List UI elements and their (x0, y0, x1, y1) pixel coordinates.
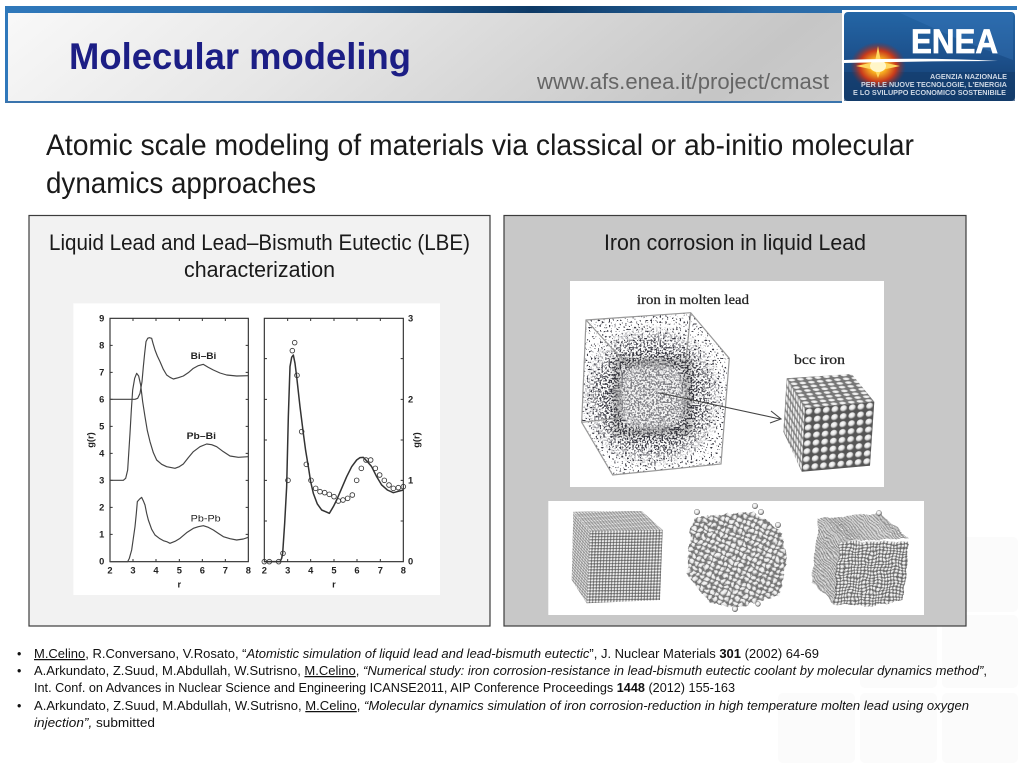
dissolving iron cluster (687, 503, 787, 612)
ENEA logo (842, 10, 1018, 103)
right g(r) plot (262, 313, 421, 590)
right plot labels: 6 (354, 566, 360, 576)
right plot labels (262, 313, 421, 590)
left plot labels (85, 313, 251, 590)
left plot labels: 3 (99, 475, 104, 485)
reference 1: • (17, 647, 21, 661)
left plot labels: 6 (200, 566, 205, 576)
intro heading (46, 129, 914, 200)
left plot labels: 7 (223, 566, 228, 576)
figure: corrosion sequence (548, 501, 924, 615)
logo tagline: PER LE NUOVE TECNOLOGIE, L'ENERGIA (861, 80, 1008, 89)
left plot labels: Bi–Bi (191, 351, 216, 361)
left plot labels: 4 (99, 448, 105, 458)
right plot labels: 5 (331, 566, 337, 576)
right plot labels: r (332, 580, 336, 590)
reference 2: • (17, 664, 21, 678)
data point markers (262, 340, 406, 564)
partially corroded iron cube (812, 510, 909, 607)
panel heading: LBE: characterization (184, 257, 335, 282)
left plot labels: 5 (99, 421, 104, 431)
bcc iron cube (783, 374, 874, 472)
logo tagline: E LO SVILUPPO ECONOMICO SOSTENIBILE (853, 88, 1006, 97)
logo tagline: AGENZIA NAZIONALE (930, 72, 1007, 81)
left plot labels: 8 (246, 566, 251, 576)
right plot labels: 4 (308, 566, 314, 576)
g(r) chart figure (73, 303, 440, 595)
left plot labels: 5 (177, 566, 182, 576)
right plot labels: g(r) (411, 432, 421, 448)
logo wordmark: ENEA (911, 23, 998, 61)
molten lead atom cloud (580, 310, 732, 478)
figure: iron in molten lead (570, 281, 884, 487)
label: iron in molten lead: iron in molten lead (637, 293, 749, 308)
right plot labels: 3 (285, 566, 290, 576)
reference 1: M.Celino, R.Conversano, V.Rosato, “ Atomistic simulation of liquid lead and lead-bismuth eutectic ”, J. Nuclear Materials 301 (2002) 64-69 (34, 647, 819, 661)
label: bcc iron: bcc iron (794, 353, 845, 368)
left plot labels: 7 (99, 367, 104, 377)
left plot labels: 3 (130, 566, 136, 576)
right plot labels: 0 (408, 557, 413, 567)
left plot labels: Pb–Bi (187, 431, 216, 441)
panel heading: LBE: Liquid Lead and Lead–Bismuth Eutectic (LBE) (49, 230, 470, 255)
header banner (5, 6, 1017, 103)
left plot labels: 2 (107, 566, 113, 576)
intro heading: dynamics approaches (46, 167, 316, 200)
right plot labels: 3 (408, 313, 413, 323)
left plot labels: 9 (99, 313, 104, 323)
panel: iron corrosion (504, 216, 966, 626)
panel heading: LBE (49, 230, 470, 282)
left plot labels: 2 (99, 502, 104, 512)
background watermark squares (778, 537, 1018, 763)
left g(r) plot (85, 313, 251, 590)
right plot labels: 2 (262, 566, 267, 576)
left plot labels: r (178, 580, 182, 590)
reference 3 (17, 699, 969, 730)
references list (17, 647, 987, 730)
right plot labels: 1 (408, 475, 413, 485)
panel: liquid lead and LBE (29, 216, 490, 626)
left plot labels: 4 (153, 566, 159, 576)
right plot labels: 2 (408, 394, 413, 404)
reference 3: injection”, submitted (34, 716, 155, 730)
arrow to bcc iron (660, 393, 781, 423)
logo tagline (853, 72, 1008, 97)
reference 3: A.Arkundato, Z.Suud, M.Abdullah, W.Sutrisno, M.Celino, “Molecular dynamics simulation of iron corrosion-reduction in high temperature molten lead using oxygen (34, 699, 969, 713)
left plot labels: 8 (99, 340, 104, 350)
intact iron cube (572, 511, 663, 603)
title: Molecular modeling (69, 36, 411, 77)
left plot labels: g(r) (85, 432, 95, 448)
reference 2 (17, 664, 987, 695)
left plot labels: 1 (99, 529, 104, 539)
right plot labels: 8 (401, 566, 406, 576)
reference 2: Int. Conf. on Advances in Nuclear Science and Engineering ICANSE2011, AIP Conference Proceedings 1448 (2012) 155-163 (34, 681, 735, 695)
reference 3: • (17, 699, 21, 713)
intro heading: Atomic scale modeling of materials via classical or ab-initio molecular (46, 129, 914, 162)
right plot labels: 7 (378, 566, 383, 576)
panel heading: iron corrosion: Iron corrosion in liquid Lead (604, 230, 866, 255)
left plot labels: Pb-Pb (191, 514, 221, 524)
left plot labels: 0 (99, 557, 104, 567)
website url: www.afs.enea.it/project/cmast (536, 69, 829, 94)
left plot labels: 6 (99, 394, 104, 404)
reference 2: A.Arkundato, Z.Suud, M.Abdullah, W.Sutrisno, M.Celino, “Numerical study: iron corrosion-resistance in lead-bismuth eutectic coolant by molecular dynamics method” , (34, 664, 987, 678)
